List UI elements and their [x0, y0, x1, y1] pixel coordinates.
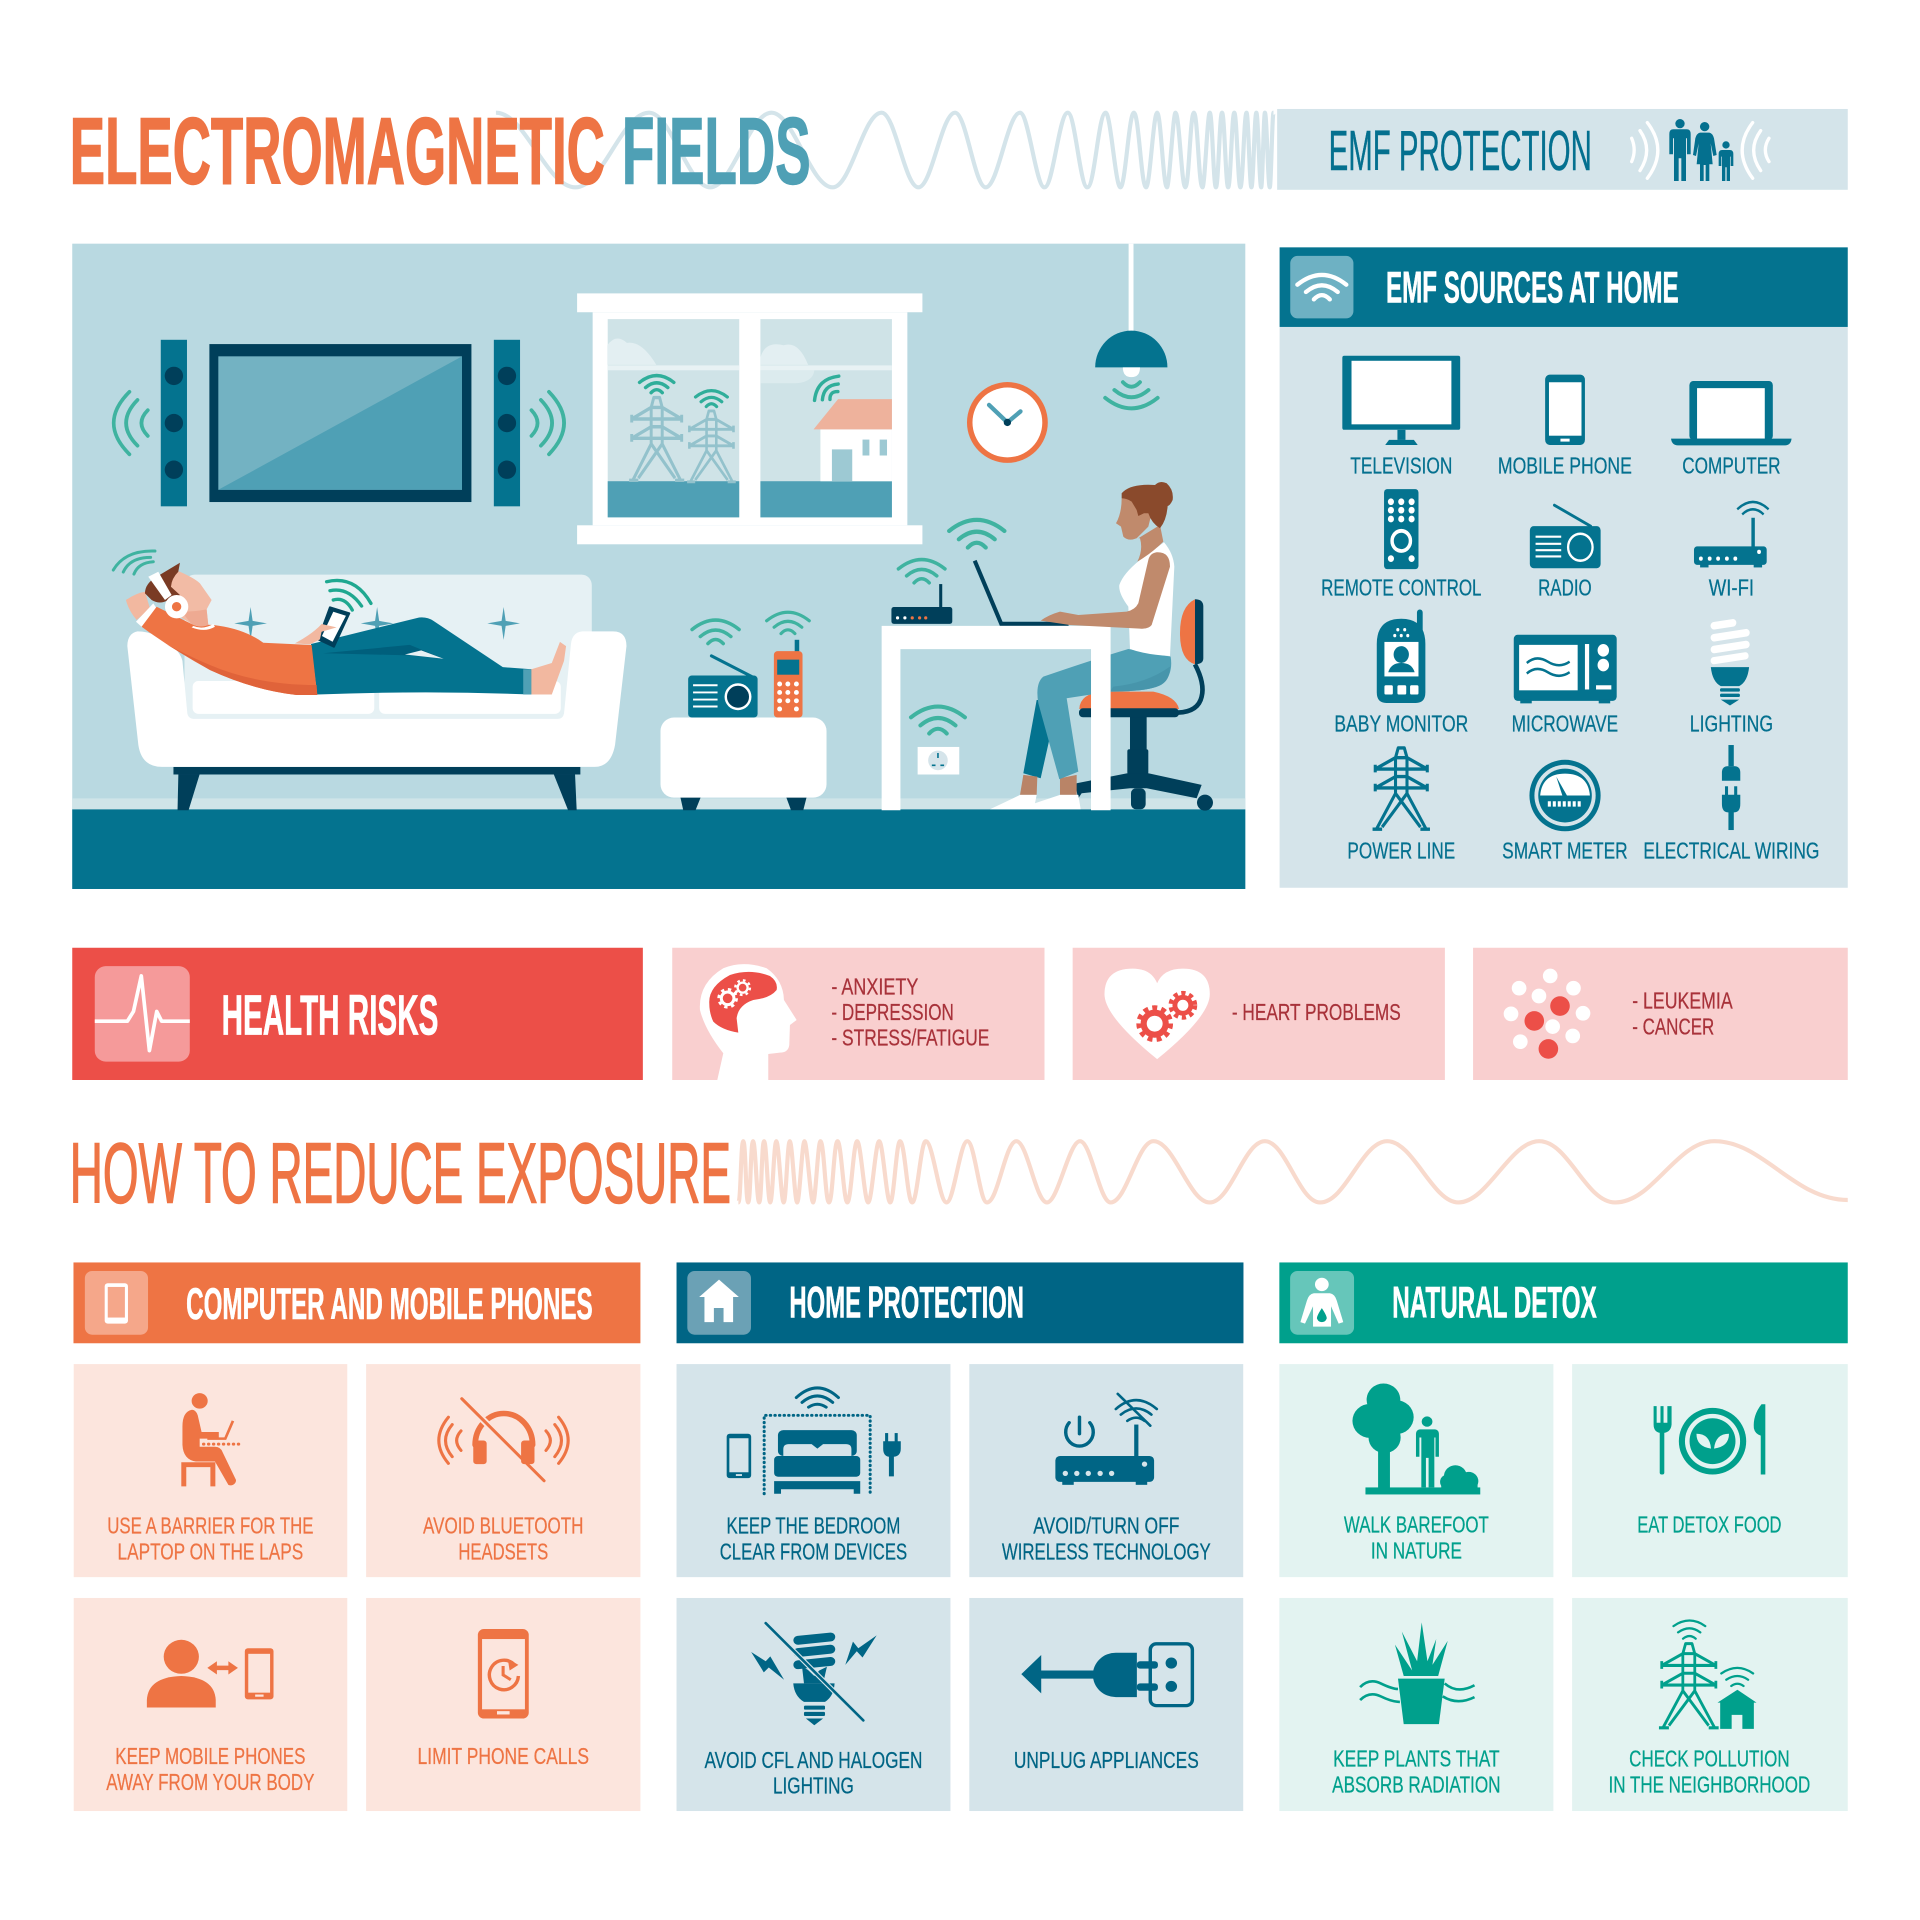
panel: natural detox — [1279, 1262, 1848, 1811]
source labels: COMPUTER — [1682, 453, 1781, 479]
icon: crossed-out CFL bulb — [751, 1623, 877, 1725]
source labels: ELECTRICAL WIRING — [1643, 838, 1819, 864]
icon: phone with clock — [478, 1629, 529, 1719]
panel: home protection — [677, 1262, 1243, 1811]
woman on office chair — [990, 482, 1213, 811]
source labels: WI-FI — [1709, 575, 1754, 601]
card labels — [1332, 1512, 1810, 1798]
card labels: AVOID CFL AND HALOGEN — [704, 1747, 922, 1773]
icon: power line — [1373, 748, 1430, 829]
icon: tree and person — [1352, 1384, 1480, 1494]
panel: mental health risks: - ANXIETY — [831, 973, 918, 999]
card labels: EAT DETOX FOOD — [1637, 1512, 1782, 1538]
icon: remote control — [1384, 489, 1418, 569]
icon: blood cells — [1504, 969, 1590, 1059]
panel: mental health risks: - STRESS/FATIGUE — [831, 1025, 989, 1051]
window with power lines and house — [577, 293, 922, 544]
source labels — [1321, 453, 1819, 864]
section header: COMPUTER AND MOBILE PHONES — [186, 1280, 593, 1329]
card labels: CHECK POLLUTION — [1629, 1746, 1790, 1772]
panel: heart problems — [1073, 948, 1445, 1080]
card labels: IN NATURE — [1371, 1537, 1462, 1563]
card labels: ABSORB RADIATION — [1332, 1772, 1501, 1798]
card labels: LAPTOP ON THE LAPS — [118, 1539, 303, 1565]
icon: baby monitor — [1377, 610, 1425, 703]
desk frame — [882, 626, 1111, 810]
panel: computer and mobile phones — [73, 1262, 640, 1811]
man: legs — [311, 617, 566, 695]
desk with woman at laptop — [882, 482, 1213, 811]
panel: heart problems: - HEART PROBLEMS — [1232, 999, 1401, 1025]
side table with radio and cordless phone — [660, 612, 827, 810]
source labels: REMOTE CONTROL — [1321, 575, 1482, 601]
icon: wi-fi router — [1694, 502, 1769, 567]
panel: health risks header: HEALTH RISKS — [222, 984, 438, 1047]
panel header — [1280, 247, 1848, 327]
panel: leukemia and cancer: - CANCER — [1632, 1014, 1714, 1040]
panel: leukemia and cancer: - LEUKEMIA — [1632, 987, 1733, 1013]
card labels: AVOID BLUETOOTH — [423, 1513, 583, 1539]
banner: EMF protection: EMF PROTECTION — [1329, 119, 1592, 182]
panel header: EMF SOURCES AT HOME — [1386, 263, 1679, 312]
icon: mobile phone — [1545, 375, 1585, 445]
section header — [73, 1262, 640, 1343]
source labels: MOBILE PHONE — [1498, 453, 1632, 479]
card labels: AVOID/TURN OFF — [1033, 1513, 1179, 1539]
panel: leukemia and cancer — [1473, 948, 1848, 1080]
source labels: MICROWAVE — [1512, 711, 1618, 737]
icon: family with signal waves — [1632, 119, 1769, 181]
title: ELECTROMAGNETIC — [70, 99, 605, 204]
section header: HOME PROTECTION — [789, 1279, 1024, 1328]
icon: heart with gears — [1104, 969, 1210, 1059]
wall clock — [967, 382, 1048, 463]
card labels: USE A BARRIER FOR THE — [107, 1513, 313, 1539]
source labels: POWER LINE — [1347, 838, 1455, 864]
source labels: SMART METER — [1502, 838, 1628, 864]
section header: NATURAL DETOX — [1392, 1279, 1597, 1328]
man: torso, head and phone — [113, 551, 371, 695]
card labels: AWAY FROM YOUR BODY — [106, 1769, 314, 1795]
card labels: KEEP THE BEDROOM — [727, 1513, 900, 1539]
card labels: LIGHTING — [773, 1772, 854, 1798]
card labels: UNPLUG APPLIANCES — [1014, 1747, 1199, 1773]
icon: router turned off — [1055, 1394, 1157, 1485]
card labels: HEADSETS — [458, 1539, 548, 1565]
card labels: KEEP PLANTS THAT — [1333, 1746, 1500, 1772]
icon: smart meter — [1529, 760, 1601, 831]
panel: health risks header — [72, 948, 643, 1080]
card labels — [704, 1513, 1211, 1798]
card labels: CLEAR FROM DEVICES — [720, 1539, 907, 1565]
source labels: TELEVISION — [1350, 453, 1452, 479]
icon: television — [1342, 356, 1460, 445]
panel: living room illustration — [72, 244, 1245, 889]
icon: head with gears — [700, 964, 797, 1080]
pendant lamp — [1095, 244, 1167, 408]
icon: person with laptop barrier — [181, 1393, 239, 1486]
laptop — [975, 561, 1069, 624]
icon: lighting — [1710, 619, 1750, 705]
section header — [677, 1262, 1243, 1343]
source labels: BABY MONITOR — [1334, 711, 1468, 737]
decorative wave: bottom — [738, 1141, 1848, 1202]
decorative wave: top — [496, 113, 1273, 187]
icon: crossed-out headset — [439, 1399, 568, 1481]
icon: electrical wiring — [1722, 745, 1740, 830]
card labels: WIRELESS TECHNOLOGY — [1002, 1539, 1211, 1565]
icon: radio — [1530, 505, 1601, 568]
banner: EMF protection — [1277, 109, 1848, 190]
icon: microwave — [1514, 635, 1617, 703]
source icons — [1342, 356, 1792, 831]
icon: heartbeat — [95, 966, 190, 1062]
card labels: WALK BAREFOOT — [1344, 1512, 1489, 1538]
card labels: KEEP MOBILE PHONES — [115, 1743, 305, 1769]
panel: mental health risks: - DEPRESSION — [831, 999, 954, 1025]
card labels — [106, 1513, 589, 1795]
icon: bedroom clear of devices — [727, 1388, 901, 1494]
sofa with reclining man — [113, 551, 626, 810]
television and speakers — [114, 340, 564, 506]
source labels: LIGHTING — [1690, 711, 1773, 737]
icon: potted plant — [1360, 1622, 1475, 1724]
card labels: LIMIT PHONE CALLS — [418, 1743, 589, 1769]
woman: arm — [1041, 552, 1170, 629]
icon: pylon and house — [1659, 1621, 1757, 1729]
title: FIELDS — [622, 99, 811, 204]
panel: mental health risks — [672, 948, 1044, 1080]
section header — [1279, 1262, 1848, 1343]
heading: how to reduce exposure: HOW TO REDUCE EXPOSURE — [70, 1125, 731, 1221]
card labels: IN THE NEIGHBORHOOD — [1609, 1772, 1810, 1798]
icon: person away from phone — [147, 1640, 274, 1707]
icon: plate and cutlery — [1654, 1404, 1765, 1474]
source labels: RADIO — [1538, 575, 1592, 601]
icon: unplug arrow — [1021, 1644, 1192, 1706]
panel: EMF sources at home — [1280, 247, 1848, 888]
icon: computer — [1671, 381, 1792, 445]
